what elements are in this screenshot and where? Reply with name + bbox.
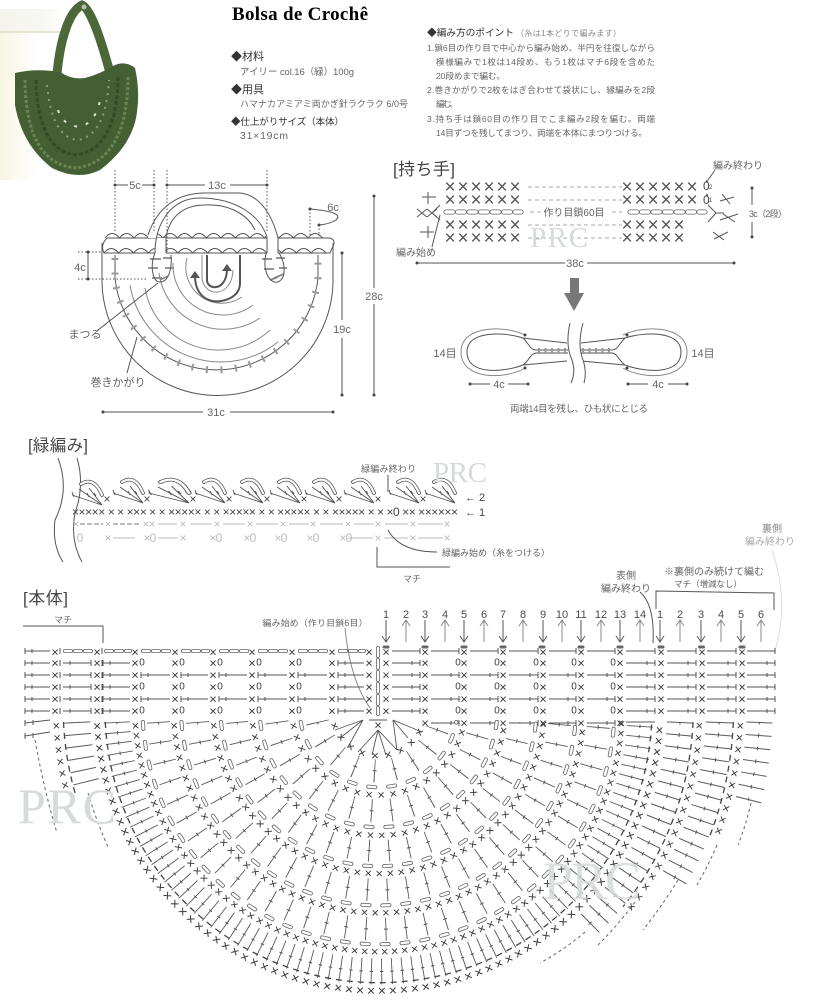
spoke ticks — [117, 722, 759, 971]
handle stitch rows: ××××××××××× — [444, 228, 685, 248]
joining stitches — [538, 348, 611, 354]
instructions text block: 14目ずつを残してまつり、両端を本体にまつりつける。 — [436, 127, 647, 138]
instructions text block: 編む。 — [436, 98, 458, 109]
dimension labels: 19c — [333, 324, 351, 336]
dimension labels: 6c — [327, 202, 339, 214]
arrow: down to closed handle — [564, 278, 584, 311]
row numbers 10 to 14: 13 — [614, 609, 626, 621]
edging labels: 緑編み終わり — [361, 463, 416, 474]
row numbers 10 to 14: 11 — [575, 609, 587, 621]
dimension labels: 28c — [365, 291, 383, 303]
materials text block: アイリー col.16（緑）100g — [240, 66, 354, 78]
inner rounds — [130, 258, 278, 362]
center stitch: × — [374, 718, 382, 732]
right labels: マチ（増減なし） — [674, 578, 742, 589]
watermark: PRC — [530, 222, 588, 254]
dimension lines — [78, 170, 319, 279]
diagram: handle chart — [393, 159, 787, 270]
cross stitch rings: ×××××××××××××××××××××××××××××××××××××××××××××××××××××××××××××××××××××××××××××××××××××××××××××××××× — [132, 720, 625, 955]
straight rows — [25, 656, 775, 718]
closed handle labels: 4c — [652, 379, 664, 391]
edging row 1 stitches: ××××× × × ××× × × ××××× × × ××××× × × ××××× × × ××××× × × ×0 ×× ×××××× — [72, 505, 458, 519]
heading: handle: [持ち手] — [393, 160, 455, 179]
row arrows — [465, 492, 485, 519]
round numbers: 2 — [709, 185, 713, 191]
closed handle dimensions — [470, 383, 687, 385]
closed handle labels: 14目 — [691, 348, 715, 360]
round numbers: 0 — [703, 179, 710, 193]
materials text block: ◆用具 — [231, 83, 264, 96]
gusset label left: マチ — [54, 615, 72, 625]
closed handle labels: 14目 — [433, 348, 457, 360]
start label: 編み始め（作り目鎖6目） — [262, 617, 368, 628]
outer ring double bars — [64, 722, 733, 983]
instructions text block: ◆編み方のポイント — [427, 26, 514, 39]
heading: edging: [緑編み] — [28, 436, 88, 455]
instructions text block: 2.巻きかがりで2枚をはぎ合わせて袋状にし、縁編みを2段 — [427, 84, 655, 95]
cross stitch rings: ×××××××××××××××× — [715, 722, 744, 834]
watermark: PRC — [433, 457, 487, 489]
direction arrows — [195, 255, 240, 301]
handle stitch rows: ×××××××××××× — [444, 176, 698, 198]
left and right loops — [461, 329, 687, 376]
center chain column — [376, 648, 380, 714]
row numbers: 123456789123456 — [383, 609, 764, 621]
materials text block: ◆仕上がりサイズ（本体） — [231, 116, 344, 128]
faint back leader — [772, 550, 782, 650]
handle labels: 編み始め — [396, 246, 436, 259]
edging labels: 緑編み始め（糸をつける） — [442, 547, 550, 558]
right labels — [601, 522, 795, 595]
diagram: finished bag — [68, 170, 383, 419]
stitching — [115, 257, 318, 370]
left outer rows — [25, 720, 387, 739]
chain count label: 作り目鎖60目 — [543, 206, 605, 219]
title: Bolsa de Crochê — [232, 4, 368, 25]
right labels: 裏側 — [762, 522, 782, 535]
start leader — [345, 628, 370, 708]
radial spokes — [77, 722, 759, 971]
oval stitch rings — [143, 722, 614, 944]
closed handle labels: 4c — [493, 379, 505, 391]
handle — [148, 193, 278, 254]
row numbers 10 to 14: 14 — [634, 609, 646, 621]
watermark lower right: PRC — [543, 851, 641, 911]
diagram: edging chart — [28, 436, 550, 584]
instructions text block: 3.持ち手は鎖60目の作り目でこま編み2段を編む。両端 — [427, 113, 655, 124]
cross stitch rings: ×××××××××××××××××××××××××××××××××××××××××××××××××××××××××××××××××××××××××××××××××××××××××××××××××××××××× — [94, 722, 663, 994]
row numbers 10 to 14 — [556, 609, 646, 621]
cross stitch rings: ×××××××××××××××× — [331, 722, 423, 758]
bag photograph — [0, 4, 138, 180]
materials text block: ◆材料 — [231, 49, 264, 63]
closed handle labels: 両端14目を残し、ひも状にとじる — [510, 403, 648, 415]
dimension labels: 4c — [74, 262, 86, 274]
wavy break lines — [54, 458, 82, 562]
row numbers 10 to 14: 10 — [556, 609, 568, 621]
cross stitch rings: ×××××××××××××××××××××××××××××××××××××××××××××× — [250, 722, 506, 838]
diagram: closed handle — [433, 323, 715, 415]
handle labels — [396, 159, 787, 270]
round numbers: 1 — [709, 198, 713, 204]
handle stitch rows: ××××××××××× — [444, 214, 685, 236]
edging labels: マチ — [403, 574, 421, 584]
dimension labels: 5c — [129, 180, 141, 192]
edging fans row 2 — [72, 480, 455, 505]
instructions text block — [427, 26, 655, 138]
instructions text block: 模様編みで1枚は14段め、もう1枚はマチ6段を含めた — [436, 56, 655, 67]
dimension labels: 13c — [208, 180, 226, 192]
cross stitch rings: ×××××××××××××××××××××××××××××××××××××××××××××××××××××××××××× — [210, 722, 546, 876]
light base row A: ××××××××××××× — [72, 517, 451, 531]
handle leaders and dimensions — [417, 170, 752, 263]
instructions text block: 20段めまで編む。 — [436, 70, 505, 81]
heading: body: [本体] — [23, 589, 68, 608]
row arrows: ← 1 — [465, 507, 485, 519]
right labels: 編み終わり — [745, 535, 795, 548]
right first bent row: ×××××× — [421, 716, 624, 730]
gusset bracket left — [23, 626, 103, 643]
row numbers 10 to 14: 12 — [595, 609, 607, 621]
right labels: 表側 — [616, 569, 636, 582]
dashed boundary lines — [35, 740, 751, 963]
foundation chain — [446, 210, 705, 214]
dimension labels: 31c — [207, 407, 225, 419]
materials text block — [231, 49, 408, 142]
edging labels — [361, 463, 550, 584]
fan joining stitches: ××××××××× — [103, 492, 427, 506]
right labels: ※裏側のみ続けて編む — [664, 565, 764, 578]
right labels: 編み終わり — [601, 582, 651, 595]
row arrows: ← 2 — [465, 492, 485, 504]
end stitches — [417, 192, 738, 240]
round numbers: 0 — [703, 193, 710, 207]
handle feet stitched — [148, 258, 287, 280]
right leaders and bracket — [640, 591, 774, 643]
dashed continuation lines — [528, 187, 622, 238]
instructions text block: 1.鎖6目の作り目で中心から編み始め、半円を往復しながら — [427, 42, 655, 53]
center start fans — [335, 720, 422, 755]
bag outline — [102, 243, 333, 396]
handle labels: 3c（2段） — [749, 208, 787, 219]
handle stitch rows: ×××××××××××× — [444, 190, 698, 210]
materials text block: 31×19cm — [240, 130, 288, 142]
edging leaders and bracket — [377, 475, 450, 567]
dimension labels — [68, 180, 383, 419]
dimension labels: まつる — [68, 328, 102, 341]
cross stitch rings: ×××××××××××××××××××××××××××××× — [290, 722, 466, 798]
arrows down — [382, 620, 745, 642]
handle labels: 編み終わり — [713, 159, 763, 172]
watermark lower left: PRC — [18, 778, 116, 834]
light base row B: 0××0××0×0×0×0×0××× — [77, 531, 451, 545]
top chain row: ××××××××××××××××××× — [51, 644, 746, 660]
cross stitch rings: ×××××××××××××××××××××× — [628, 722, 702, 910]
handle labels: 38c — [566, 258, 584, 270]
materials text block: ハマナカアミアミ両かぎ針ラクラク 6/0号 — [240, 98, 408, 109]
scallop edge and band — [103, 234, 334, 253]
cross stitch rings: ×××××××××××××××××××××××××××××××××××××××××××××××××××××××××××××××××××××××××××× — [171, 722, 586, 916]
arrows up — [402, 620, 765, 642]
closed handle labels — [433, 348, 715, 415]
instructions text block: （糸は1本どりで編みます） — [516, 28, 621, 38]
dimension labels: 巻きかがり — [90, 375, 146, 389]
break marks — [568, 323, 585, 383]
